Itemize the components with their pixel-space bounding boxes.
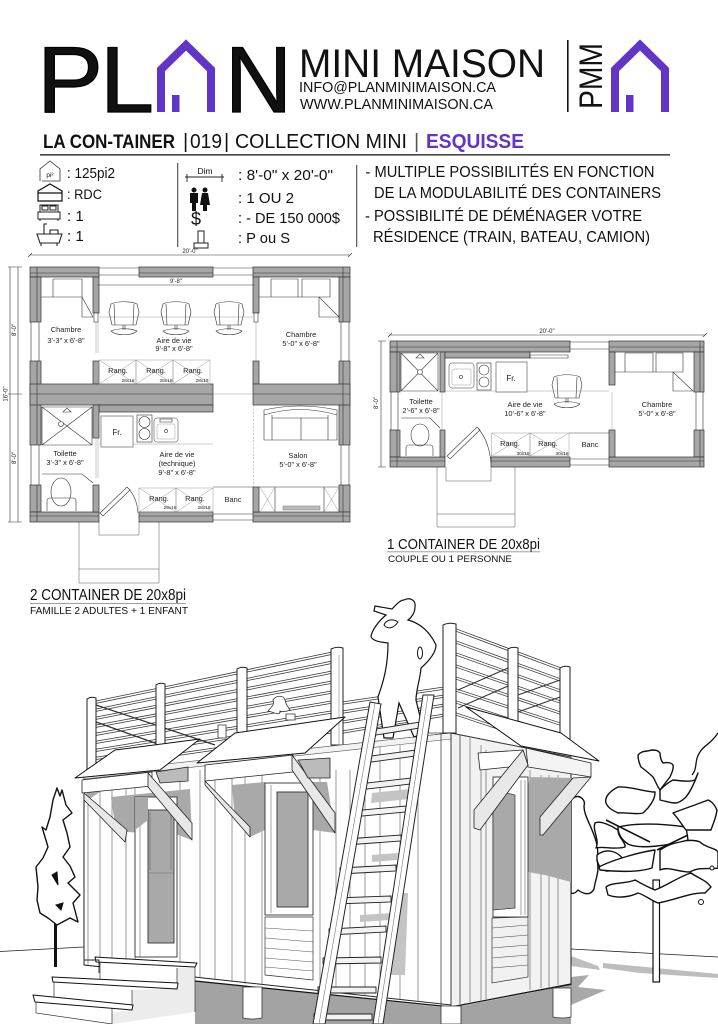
header logo [37,27,665,132]
living area: Rang. [183,366,203,375]
specs column 2: : P ou S [238,230,290,247]
living area [447,375,609,463]
specs column 1: : RDC [67,186,102,202]
bathroom [401,353,442,456]
ground lines and shadows [0,947,718,1005]
living area: 9'-8" [170,279,182,285]
living area: 30x18 [516,451,530,457]
specs column 1: : 125pi2 [67,165,115,182]
bathroom: 2'-6" x 6'-8" [402,406,440,415]
shadows under awnings [84,777,571,882]
walls [390,341,704,467]
icon: area: pi² [46,172,54,179]
left bedroom: 3'-3" x 6'-8" [47,336,85,345]
icon: people [190,188,210,211]
feature notes: DE LA MODULABILITÉ DES CONTAINERS [374,183,661,202]
living area: Banc [582,440,599,449]
specs column 2: : - DE 150 000$ [238,210,341,227]
entry steps [437,467,515,527]
awning 1 [75,739,200,842]
kitchen [445,362,530,392]
entry door and storage [100,487,253,516]
feature notes: - MULTIPLE POSSIBILITÉS EN FONCTION [366,162,654,181]
living area: Aire de vie [157,336,191,345]
side window and siding [492,777,528,983]
lounge: Salon [289,451,307,460]
living area [97,279,255,384]
awning 3 [466,707,599,835]
right tree [594,733,718,982]
caption: 2 containers: FAMILLE 2 ADULTES + 1 ENFANT [30,606,188,617]
entry door and storage: 28x18 [163,505,177,511]
feature notes: - POSSIBILITÉ DE DÉMÉNAGER VOTRE [365,206,642,225]
left bedroom: Chambre [51,325,81,334]
bathroom: Toilette [409,397,433,406]
bedroom: Chambre [642,400,672,409]
caption: 2 containers: 2 CONTAINER DE 20x8pi [30,587,186,604]
kitchen: Aire de vie [160,450,194,459]
brand name and contacts: MINI MAISON [299,42,545,86]
entry steps [33,947,197,1024]
specs column 1: : 1 [67,208,84,225]
living area: 10'-6" x 6'-8" [504,409,546,418]
caption: 1 container [387,537,540,565]
bedroom [612,353,693,430]
icon: floor level [38,184,62,201]
dimensions: 16'-0" [4,386,10,402]
logo word PLAN: L [100,27,154,132]
title bar: LA CON-TAINER [43,132,175,153]
bedroom: 5'-0" x 6'-8" [638,409,676,418]
living area: Rang. [500,439,520,448]
living area: 30x18 [555,451,569,457]
right bedroom: 5'-0" x 6'-8" [282,339,320,348]
icon: dimension [185,166,224,182]
dimensions [4,249,352,522]
icon: bath [37,224,62,246]
rear fence left side [92,652,445,767]
kitchen: Fr. [506,374,516,383]
entry door and storage: 28x18 [197,505,211,511]
caption: 1 container: 1 CONTAINER DE 20x8pi [387,537,540,553]
feature notes: RÉSIDENCE (TRAIN, BATEAU, CAMION) [373,227,650,246]
walls [30,267,350,522]
entry door and storage: Rang. [149,494,169,503]
building right facade [426,733,571,1010]
specs column 2: : 8'-0" x 20'-0" [238,167,333,184]
icon: bed [38,205,60,221]
icon: price: $ [191,209,201,229]
title bar: ESQUISSE [426,131,524,153]
title bar: COLLECTION MINI [235,131,407,153]
living area: Rang. [146,366,166,375]
living area: Rang. [538,439,558,448]
entry door and storage: Banc [225,495,242,504]
front window and siding [265,783,313,980]
floor plan: 2 containers [4,249,352,583]
kitchen [99,415,213,477]
brand name and contacts: INFO@PLANMINIMAISON.CA [299,79,496,96]
bathroom [42,407,98,511]
PMM logo mark [567,40,665,112]
logo word PLAN: P [37,27,103,132]
kitchen: 9'-8" x 6'-8" [158,468,196,477]
ladder shadows [360,789,410,975]
bathroom: Toilette [53,449,77,458]
title bar: 019 [190,131,222,153]
logo word PLAN: N [225,27,292,132]
living area: 28x18 [121,378,135,384]
crawlspace and piers [195,981,571,1024]
caption: 1 container: COUPLE OU 1 PERSONNE [388,554,512,565]
PMM logo mark: PMM [573,43,609,109]
awning 2 [197,717,345,837]
specs column 2 [185,166,341,248]
kitchen: (technique) [159,459,195,468]
feature notes [365,162,661,246]
kitchen: Fr. [112,428,122,437]
specs column 1: : 1 [67,228,84,245]
entry steps [79,522,159,583]
caption: 2 containers [30,587,188,617]
corner fence and right fence [443,623,570,740]
living area: 28x18 [195,378,209,384]
living area: 9'-8" x 6'-8" [155,344,193,353]
title bar [40,131,670,156]
living area: Rang. [108,366,128,375]
dimensions: 8'-0" [12,324,18,336]
front door [135,797,177,957]
dimensions: 8'-0" [12,452,18,464]
person silhouette [371,599,436,738]
dimensions: 20'-0" [539,329,555,335]
perspective view [0,599,718,1024]
right bedroom [254,279,339,360]
entry door and storage: Rang. [185,494,205,503]
dimensions [374,329,707,467]
fence posts left side [87,647,343,790]
roof vent and distant shape [218,696,295,738]
left tree [36,788,80,967]
icon: dimension: Dim [197,166,213,176]
brand name and contacts [299,42,545,113]
specs column 1 [37,161,115,246]
bathroom: 3'-3" x 6'-8" [46,458,84,467]
right bedroom: Chambre [286,330,316,339]
icon: foundation [194,231,208,248]
title bar: | [183,131,188,153]
title bar: | [414,131,419,153]
lounge: 5'-0" x 6'-8" [279,460,317,469]
background tree [571,797,598,894]
floor plan: 1 container [374,329,707,527]
dimensions: 8'-0" [374,397,380,409]
brand name and contacts: WWW.PLANMINIMAISON.CA [300,96,493,113]
title bar: | [224,131,229,153]
living area: Aire de vie [508,400,542,409]
living area: 28x18 [159,378,173,384]
building left facade [84,733,451,1005]
specs column 2: : 1 OU 2 [238,190,294,207]
left bedroom [41,279,98,353]
lounge [254,405,339,512]
dimensions: 20'-0" [182,249,198,255]
logo word PLAN [37,27,292,132]
ladder [313,695,434,1024]
